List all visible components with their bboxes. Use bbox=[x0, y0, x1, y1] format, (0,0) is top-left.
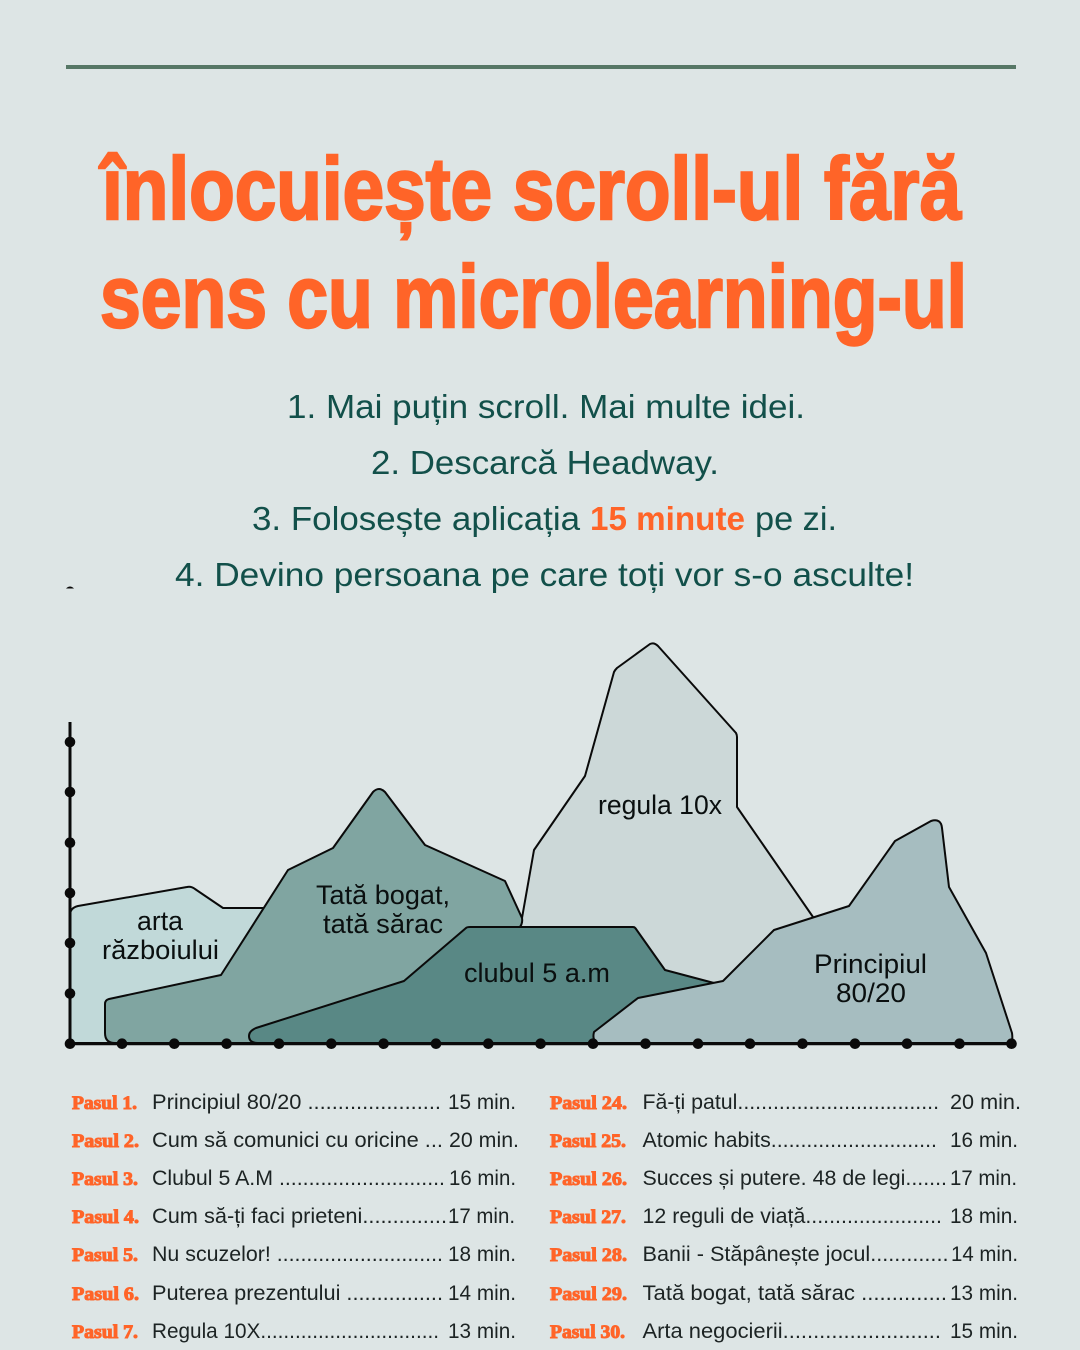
step list: left column: 17 min. bbox=[448, 1205, 515, 1228]
step list: left column: 18 min. bbox=[448, 1243, 516, 1266]
numbered intro list bbox=[175, 389, 914, 594]
mountain: clubul 5 a.m bbox=[249, 927, 760, 1043]
step list: right column: 12 reguli de viață....................... bbox=[642, 1205, 942, 1228]
step list: right column: Banii - Stăpânește jocul............. bbox=[642, 1243, 948, 1266]
step list: right column: 17 min. bbox=[950, 1167, 1017, 1190]
clipped dot fragment bbox=[66, 586, 74, 588]
step list: right column: Tată bogat, tată sărac .............. bbox=[642, 1282, 947, 1305]
mountain: Tată bogat, tată sărac: tată sărac bbox=[323, 909, 443, 939]
step list: left column: Pasul 1. bbox=[72, 1094, 137, 1114]
step list: left column: Regula 10X............................... bbox=[152, 1320, 439, 1343]
mountain: Tată bogat, tată sărac: Tată bogat, bbox=[316, 880, 450, 910]
step list: right column: Pasul 24. bbox=[550, 1094, 627, 1114]
step list: right column: Pasul 30. bbox=[550, 1323, 625, 1343]
step list: right column: Arta negocierii.......................... bbox=[642, 1320, 941, 1343]
step list: left column: Pasul 4. bbox=[72, 1208, 139, 1228]
step list: left column: Pasul 6. bbox=[72, 1285, 139, 1305]
mountain: Principiul 80/20: 80/20 bbox=[836, 978, 906, 1008]
mountain: clubul 5 a.m: clubul 5 a.m bbox=[464, 958, 610, 988]
step list: left column: Pasul 2. bbox=[72, 1132, 139, 1152]
step list: left column: Cum să comunici cu oricine ... bbox=[152, 1129, 443, 1152]
mountain chart bbox=[65, 643, 1017, 1049]
step list: right column: 16 min. bbox=[950, 1129, 1018, 1152]
step list: left column bbox=[72, 1091, 519, 1343]
step list: right column: 18 min. bbox=[950, 1205, 1018, 1228]
step list: left column: Puterea prezentului ................ bbox=[152, 1282, 443, 1305]
title bbox=[99, 139, 967, 346]
step list: left column: Pasul 7. bbox=[72, 1323, 138, 1343]
step list: left column: Clubul 5 A.M ............................ bbox=[152, 1167, 445, 1190]
mountain: regula 10x bbox=[519, 643, 860, 1043]
step list: left column: Pasul 5. bbox=[72, 1246, 138, 1266]
chart axes with dots bbox=[65, 722, 1017, 1049]
step list: right column: Atomic habits............................ bbox=[642, 1129, 937, 1152]
step list: right column: Fă-ți patul.................................. bbox=[642, 1091, 939, 1114]
numbered intro list: 1. Mai puțin scroll. Mai multe idei. bbox=[287, 389, 805, 426]
step list: left column: 16 min. bbox=[449, 1167, 516, 1190]
step list: left column: Pasul 3. bbox=[72, 1170, 138, 1190]
numbered intro list: 4. Devino persoana pe care toți vor s-o asculte! bbox=[175, 557, 914, 594]
step list: left column: Nu scuzelor! ............................ bbox=[152, 1243, 443, 1266]
step list: right column: Pasul 26. bbox=[550, 1170, 627, 1190]
step list: right column: Pasul 25. bbox=[550, 1132, 626, 1152]
mountain: arta războiului: arta bbox=[137, 906, 183, 936]
mountain: regula 10x: regula 10x bbox=[598, 790, 722, 820]
step list: left column: 13 min. bbox=[448, 1320, 516, 1343]
top rule bbox=[66, 65, 1016, 69]
numbered intro list: 15 minute bbox=[590, 501, 745, 538]
step list: right column: 13 min. bbox=[950, 1282, 1018, 1305]
mountain: Tată bogat, tată sărac bbox=[105, 789, 560, 1043]
step list: right column: Pasul 28. bbox=[550, 1246, 627, 1266]
mountain: Principiul 80/20: Principiul bbox=[814, 949, 927, 979]
step list: right column: Pasul 29. bbox=[550, 1285, 627, 1305]
numbered intro list: 2. Descarcă Headway. bbox=[371, 445, 719, 482]
step list: right column bbox=[550, 1091, 1021, 1343]
step list: left column: 20 min. bbox=[449, 1129, 519, 1152]
step list: right column: 20 min. bbox=[950, 1091, 1021, 1114]
step list: left column: 15 min. bbox=[448, 1091, 516, 1114]
mountain: arta războiului: războiului bbox=[102, 935, 219, 965]
step list: right column: 14 min. bbox=[951, 1243, 1018, 1266]
mountain: Principiul 80/20 bbox=[593, 820, 1012, 1043]
step list: left column: Cum să-ți faci prieteni.............. bbox=[152, 1205, 447, 1228]
step list: right column: 15 min. bbox=[950, 1320, 1018, 1343]
numbered intro list: pe zi. bbox=[755, 501, 837, 538]
numbered intro list: 3. Folosește aplicația bbox=[252, 501, 580, 538]
mountain: arta războiului bbox=[70, 887, 320, 1043]
step list: left column: Principiul 80/20 ...................... bbox=[152, 1091, 441, 1114]
step list: right column: Succes și putere. 48 de legi....... bbox=[642, 1167, 947, 1190]
step list: right column: Pasul 27. bbox=[550, 1208, 626, 1228]
step list: left column: 14 min. bbox=[448, 1282, 516, 1305]
